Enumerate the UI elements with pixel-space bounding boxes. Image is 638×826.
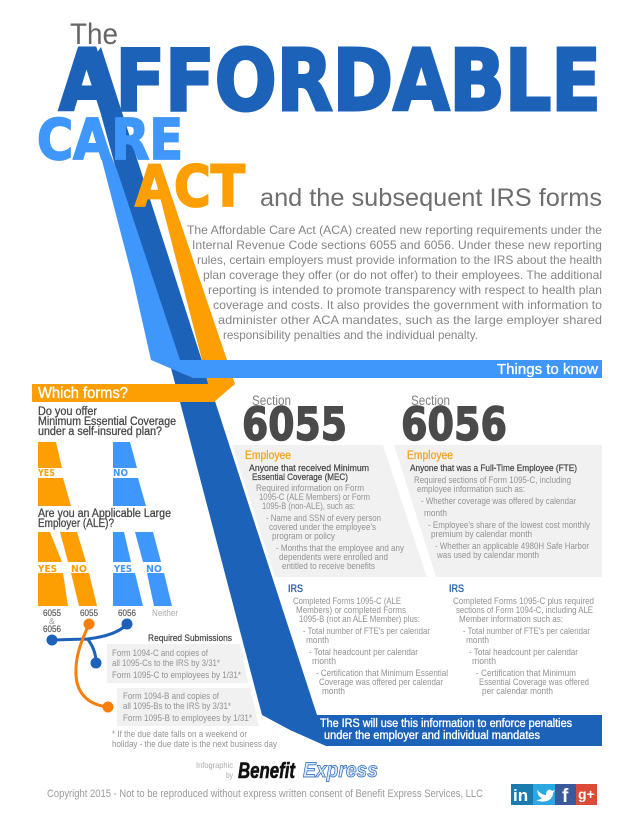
text block: 6055 IRS: month <box>312 656 336 667</box>
panel: 6056 employee: - Whether an applicable 4980H Safe Harbor <box>435 541 589 552</box>
panel: 6056 employee: was used by calendar month <box>436 550 539 561</box>
bars: no no: NO <box>146 564 162 575</box>
intro paragraph <box>187 223 602 342</box>
text block: 6056 IRS: Completed Forms 1095-C plus required <box>453 596 594 607</box>
panel: 6056 employee: month <box>424 508 447 519</box>
footnote: holiday - the due date is the next business day <box>112 739 277 750</box>
panel: 6055 employee: Essential Coverage (MEC) <box>252 472 348 483</box>
credit: infographic by <box>196 760 234 780</box>
submission box: 1095-C: Form 1095-C to employees by 1/31* <box>112 670 241 681</box>
result labels: 6056 <box>118 608 136 619</box>
title: the: The <box>70 18 118 51</box>
text block: 6056 IRS: month <box>466 635 489 646</box>
credit: infographic by: Infographic <box>196 760 234 770</box>
submission box: 1095-B: Form 1095-B to employees by 1/31* <box>123 713 252 724</box>
text block: 6055 IRS: - Total number of FTE's per calendar <box>303 626 430 637</box>
panel: 6055 employee: Anyone that received Minimum <box>249 463 369 474</box>
submission box: 1095-B <box>117 688 259 726</box>
panel: 6056 employee: premium by calendar month <box>431 529 532 540</box>
text block: 6055 IRS: Coverage was offered per calendar <box>319 677 443 688</box>
subtitle: and the subsequent IRS forms <box>260 184 602 212</box>
result labels: 6055 <box>43 608 61 619</box>
logo: benefit express <box>238 758 378 783</box>
result labels: 6056 <box>43 624 61 635</box>
section 6055 heading: Section <box>252 392 291 408</box>
section 6056 heading: Section <box>411 392 450 408</box>
text block: 6055 IRS <box>288 583 448 697</box>
question: applicable large employer: Employer (ALE)? <box>38 518 114 530</box>
bars: no no <box>135 532 172 606</box>
panel: 6055 employee: program or policy <box>272 531 335 542</box>
result labels: Neither <box>152 608 178 619</box>
panel: 6055 employee: - Name and SSN of every person <box>266 513 381 524</box>
text block: 6056 IRS: - Total number of FTE's per calendar <box>463 626 590 637</box>
ribbon: light blue things to know band <box>100 153 602 378</box>
text block: 6055 IRS: Completed Forms 1095-C (ALE <box>293 596 401 607</box>
logo: benefit express: Express <box>303 759 378 782</box>
panel: 6056 employee: Employee <box>407 450 453 462</box>
question: applicable large employer <box>38 508 171 530</box>
intro paragraph: reporting is intended to promote transparency with respect to health plan <box>208 283 602 297</box>
text block: 6056 IRS: month <box>472 656 496 667</box>
bars: first question no: NO <box>113 468 128 479</box>
bars: yes yes <box>37 532 68 606</box>
bars: yes yes: YES <box>37 564 57 575</box>
bars: no yes: YES <box>113 564 132 575</box>
panel: 6055 employee: entitled to receive benefits <box>282 561 375 572</box>
text block: 6055 IRS: month <box>306 635 329 646</box>
ribbon: dark blue main band <box>86 47 602 746</box>
panel: 6055 employee: Employee <box>245 450 291 462</box>
footnote <box>112 729 277 750</box>
social icons: g+ <box>578 786 595 802</box>
social icons: in <box>513 786 528 805</box>
text block: 6056 IRS: Member information such as: <box>459 614 563 625</box>
text block: 6056 IRS <box>449 583 594 697</box>
intro paragraph: coverage and costs. It also provides the government with information to <box>213 298 602 312</box>
text block: 6056 IRS: IRS <box>449 583 464 595</box>
connector: orange path <box>76 618 114 712</box>
panel: 6056 employee <box>394 445 602 577</box>
bars: first question no <box>113 442 146 506</box>
text block: 6056 IRS: - Total headcount per calendar <box>469 647 578 658</box>
question: minimum essential coverage <box>38 406 176 438</box>
submission box: 1095-B: all 1095-Bs to the IRS by 3/31* <box>123 701 231 712</box>
submission box: 1095-B: Form 1094-B and copies of <box>123 691 219 702</box>
section 6055 heading: 6055 <box>242 398 347 451</box>
intro paragraph: rules, certain employers must provide information to the IRS about the health <box>197 253 602 267</box>
heading: required submissions: Required Submissions <box>148 633 232 644</box>
submission box: 1095-C <box>107 644 248 683</box>
ribbon: orange <box>153 165 235 384</box>
connector: blue paths <box>46 618 132 668</box>
text block: 6055 IRS: - Certification that Minimum Essential <box>316 668 448 679</box>
panel: 6056 employee: employee information such as: <box>417 484 525 495</box>
text block: 6055 IRS: IRS <box>288 583 303 595</box>
callout: IRS enforcement: The IRS will use this information to enforce penalties <box>320 718 572 730</box>
text block: 6055 IRS: - Total headcount per calendar <box>309 647 418 658</box>
bars: first question yes: YES <box>37 468 55 479</box>
text block: 6056 IRS: per calendar month <box>482 686 553 697</box>
band: which forms: Which forms? <box>38 385 128 402</box>
panel: 6055 employee <box>232 445 427 577</box>
bars: yes no <box>60 532 97 606</box>
question: applicable large employer: Are you an Applicable Large <box>38 508 171 520</box>
intro paragraph: administer other ACA mandates, such as the large employer shared <box>218 313 602 327</box>
panel: 6056 employee: Required sections of Form 1095-C, including <box>414 475 571 486</box>
text block: 6056 IRS: - Certification that Minimum <box>476 668 576 679</box>
text block: 6055 IRS: 1095-B (not an ALE Member) plus: <box>299 614 420 625</box>
intro paragraph: plan coverage they offer (or do not offer) to their employees. The additional <box>203 268 602 282</box>
panel: 6055 employee: - Months that the employee and any <box>276 543 404 554</box>
intro paragraph: responsibility penalties and the individual penalty. <box>223 328 478 342</box>
logo: benefit express: Benefit <box>238 758 296 783</box>
submission box: 1095-C: all 1095-Cs to the IRS by 3/31* <box>112 658 220 669</box>
title: act: ACT <box>135 154 245 220</box>
section 6056 heading: 6056 <box>401 398 507 451</box>
credit: infographic by: by <box>226 770 234 780</box>
band: which forms <box>32 384 235 402</box>
intro paragraph: Internal Revenue Code sections 6055 and 6056. Under these new reporting <box>192 238 602 252</box>
callout: IRS enforcement <box>320 718 572 742</box>
panel: 6056 employee: Anyone that was a Full-Time Employee (FTE) <box>410 463 577 474</box>
panel: 6055 employee: covered under the employee's <box>269 522 376 533</box>
footnote: * If the due date falls on a weekend or <box>112 729 247 740</box>
heading: things to know: Things to know <box>497 361 598 378</box>
result labels: & <box>49 616 55 626</box>
text block: 6055 IRS: month <box>322 686 345 697</box>
panel: 6056 employee: - Employee's share of the lowest cost monthly <box>428 520 590 531</box>
panel: 6056 employee: - Whether coverage was offered by calendar <box>421 496 576 507</box>
bars: no yes <box>113 532 143 606</box>
panel: 6055 employee: 1095-B (non-ALE), such as: <box>262 501 355 512</box>
panel: 6055 employee: Required information on Form <box>256 483 364 494</box>
social icons <box>511 784 597 807</box>
copyright: Copyright 2015 - Not to be reproduced without express written consent of Benefit Express Services, LLC <box>47 788 483 800</box>
result labels: 6055 <box>80 608 98 619</box>
question: minimum essential coverage: Minimum Essential Coverage <box>38 416 176 428</box>
social icons: f <box>562 786 569 807</box>
question: minimum essential coverage: under a self-insured plan? <box>38 426 162 438</box>
intro paragraph: The Affordable Care Act (ACA) created new reporting requirements under the <box>187 223 602 237</box>
callout: IRS enforcement: under the employer and individual mandates <box>324 730 540 742</box>
result labels <box>43 608 178 635</box>
submission box: 1095-C: Form 1094-C and copies of <box>112 648 208 659</box>
bars: first question yes <box>37 442 71 506</box>
title: care: CARE <box>37 108 183 173</box>
text block: 6056 IRS: Essential Coverage was offered <box>479 677 589 688</box>
text block: 6055 IRS: Members) or completed Forms <box>296 605 406 616</box>
text block: 6056 IRS: sections of Form 1094-C, including ALE <box>456 605 593 616</box>
panel: 6055 employee: 1095-C (ALE Members) or Form <box>259 492 370 503</box>
panel: 6055 employee: dependents were enrolled and <box>279 552 388 563</box>
bars: yes no: NO <box>71 564 87 575</box>
question: minimum essential coverage: Do you offer <box>38 406 97 418</box>
